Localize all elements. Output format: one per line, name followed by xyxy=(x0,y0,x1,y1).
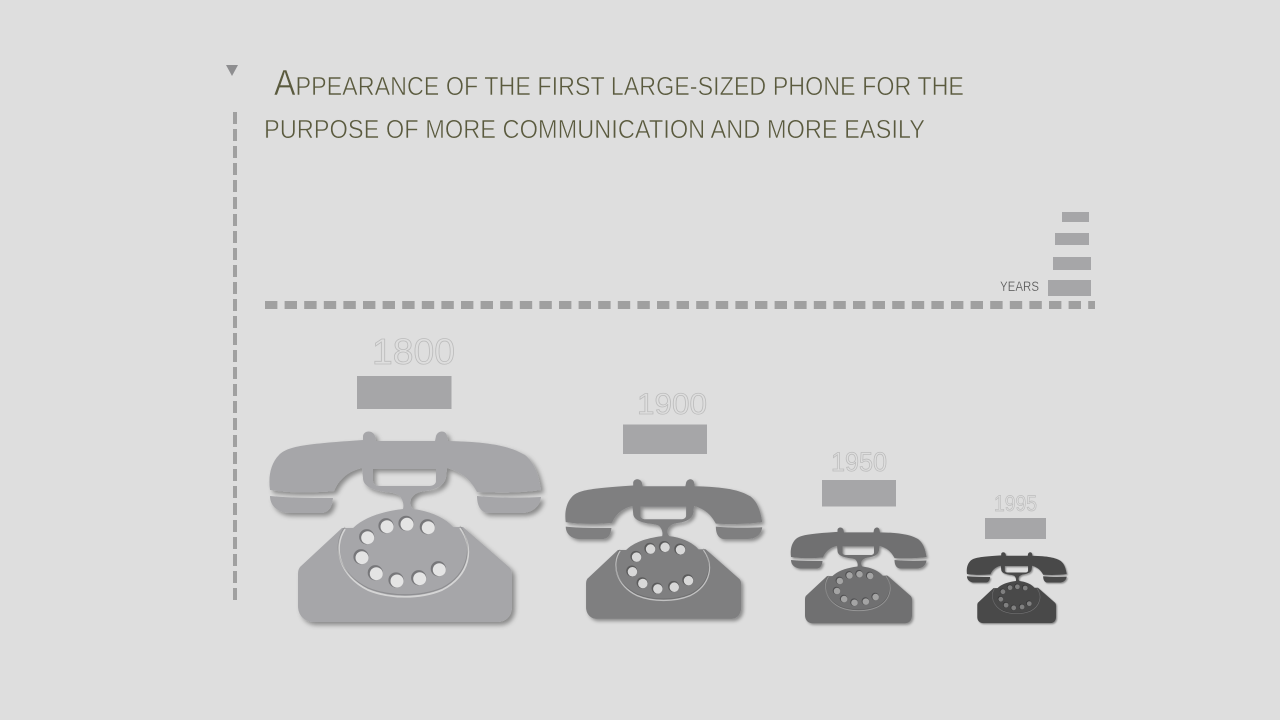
title line 2: PURPOSE OF MORE COMMUNICATION AND MORE EASILY xyxy=(264,114,925,144)
year label: 1800: 1800 xyxy=(372,331,455,372)
icon: triangle marker xyxy=(226,65,238,76)
horizontal dashed axis xyxy=(265,301,1095,309)
year label: 1900: 1900 xyxy=(637,388,707,421)
year label: 1995: 1995 xyxy=(994,491,1037,516)
bar: 1995 xyxy=(985,518,1046,539)
legend label: years: YEARS xyxy=(1000,279,1039,294)
phone: 1995 xyxy=(967,552,1067,623)
year label: 1950: 1950 xyxy=(831,447,887,477)
title line 1: APPEARANCE OF THE FIRST LARGE-SIZED PHONE FOR THE xyxy=(274,62,964,103)
vertical dashed axis xyxy=(233,112,237,605)
phone: 1950 xyxy=(791,528,926,623)
bar: 1950 xyxy=(822,480,896,506)
bar: 1900 xyxy=(623,424,707,454)
phone: 1900 xyxy=(565,479,762,619)
phone: 1800 xyxy=(269,432,541,622)
bar: 1800 xyxy=(357,376,452,409)
legend: years bars xyxy=(1048,212,1091,296)
title xyxy=(264,62,964,144)
